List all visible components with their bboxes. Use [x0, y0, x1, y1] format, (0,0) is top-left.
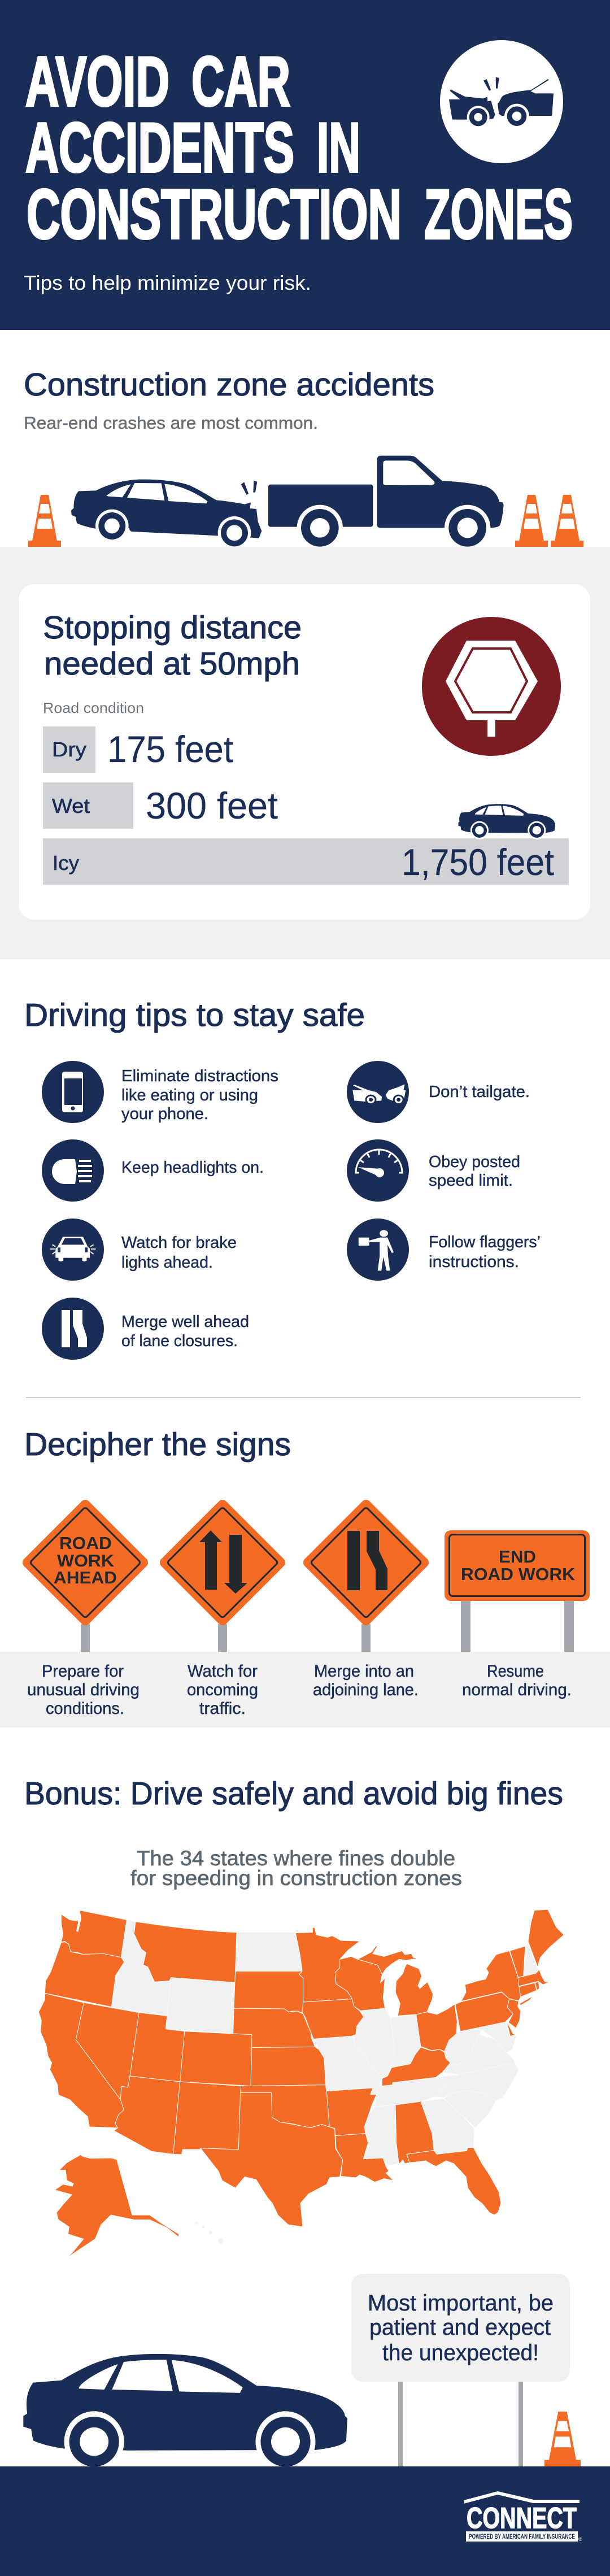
title: [25, 43, 573, 254]
map: united states: [38, 1909, 564, 2259]
heading: stopping distance: Stopping distance: [43, 610, 302, 646]
panel: decipher the signs: [0, 1426, 610, 1728]
caption: watch: Watch for: [188, 1662, 258, 1681]
bar: wet: Wet: [52, 794, 90, 817]
road sign: closing message: Most important, be: [368, 2291, 554, 2316]
heading: Driving tips to stay safe: [24, 997, 365, 1033]
road sign: closing message: [351, 2274, 570, 2466]
heading: stopping distance: [43, 610, 302, 682]
icon: car front with brake lights: [50, 1237, 96, 1261]
icon: pickup truck: [268, 456, 503, 551]
caption: resume: normal driving.: [462, 1681, 572, 1699]
sign: end road work: END: [499, 1547, 536, 1567]
icon: traffic cone far right: [551, 495, 583, 547]
icon: crashed sedan: [71, 480, 262, 550]
panel: driving tips: [24, 997, 541, 1360]
bar: dry: 175 feet: [107, 728, 233, 770]
panel: footer: [0, 2466, 610, 2576]
title: CONSTRUCTION: [27, 176, 402, 254]
icon: road sign: [422, 617, 561, 756]
icon: car crash: [440, 40, 563, 163]
tip: tailgate: [347, 1061, 530, 1123]
bar: icy: 1,750 feet: [402, 841, 554, 883]
tip: eliminate distractions: [42, 1061, 278, 1123]
icon: traffic cone right: [515, 495, 548, 547]
tip: eliminate distractions: your phone.: [121, 1105, 208, 1123]
bar: wet: 300 feet: [146, 785, 278, 826]
sign: road work ahead: ROAD: [59, 1533, 112, 1553]
caption: watch: traffic.: [199, 1699, 246, 1718]
panel: bonus: [24, 1776, 564, 2259]
caption: resume: [462, 1662, 572, 1699]
sign: two-way traffic: [165, 1505, 280, 1652]
tip: flaggers: Follow flaggers’: [429, 1233, 541, 1251]
title: AVOID: [25, 43, 169, 121]
sign: road work ahead: WORK: [57, 1551, 115, 1570]
tip: speed limit: speed limit.: [429, 1172, 513, 1190]
title: CAR: [191, 43, 290, 121]
caption: merge: adjoining lane.: [313, 1681, 419, 1699]
bar: dry: Dry: [52, 738, 86, 761]
logo: connect: [464, 2491, 582, 2542]
tip: headlights: Keep headlights on.: [121, 1159, 264, 1177]
bar: icy: Icy: [53, 851, 79, 874]
tip: brake lights: lights ahead.: [121, 1254, 213, 1272]
caption: prepare: Prepare for: [42, 1662, 124, 1681]
caption: prepare: conditions.: [46, 1699, 124, 1718]
tip: brake lights: Watch for brake: [121, 1234, 237, 1252]
caption: watch: oncoming: [187, 1681, 258, 1699]
heading: Bonus: Drive safely and avoid big fines: [24, 1776, 563, 1812]
bar: icy: [43, 838, 569, 885]
tip: speed limit: [347, 1139, 520, 1202]
map title: for speeding in construction zones: [130, 1866, 462, 1890]
panel: stopping distance card: [19, 584, 590, 920]
icon: headlight: [52, 1159, 92, 1184]
panel: gray band: [0, 547, 610, 959]
caption: prepare: [27, 1662, 140, 1718]
tip: tailgate: Don’t tailgate.: [429, 1083, 530, 1101]
tip: flaggers: [347, 1219, 541, 1281]
panel: closing scene: [23, 2274, 581, 2472]
panel: construction zone accidents: [24, 367, 583, 551]
map title: [130, 1847, 462, 1890]
road sign: closing message: patient and expect: [369, 2315, 551, 2340]
icon: traffic cone: [544, 2412, 581, 2466]
title: ACCIDENTS: [25, 109, 294, 187]
sign: road work ahead: AHEAD: [54, 1568, 117, 1587]
icon: flagger: [359, 1230, 394, 1270]
text: rear-end crashes: Rear-end crashes are most common.: [24, 413, 318, 433]
tip: flaggers: instructions.: [429, 1253, 519, 1271]
sign: road work ahead: [28, 1505, 143, 1652]
caption: merge: [313, 1662, 419, 1699]
icon: phone: [62, 1072, 83, 1112]
caption: prepare: unusual driving: [27, 1681, 140, 1699]
sign: end road work: ROAD WORK: [461, 1564, 576, 1584]
icon: traffic cone left: [28, 495, 61, 547]
caption band: [0, 1652, 610, 1728]
title: IN: [317, 109, 360, 187]
panel: header: [0, 0, 610, 330]
caption: resume: Resume: [487, 1662, 544, 1681]
tip: merge: [42, 1298, 249, 1360]
tip: speed limit: Obey posted: [429, 1153, 520, 1171]
logo: connect: ®: [578, 2536, 582, 2542]
icon: merging lanes: [62, 1310, 87, 1347]
caption: watch: [187, 1662, 258, 1718]
tip: eliminate distractions: like eating or using: [121, 1086, 258, 1104]
bar: wet: [43, 782, 278, 829]
logo: connect: CONNECT: [467, 2502, 577, 2535]
icon: speedometer: [356, 1150, 402, 1177]
heading: Construction zone accidents: [24, 367, 434, 403]
icon: sedan: [23, 2354, 347, 2472]
caption: merge: Merge into an: [314, 1662, 414, 1681]
sign: end road work: [445, 1530, 590, 1652]
icon: two cars: [352, 1084, 406, 1105]
road sign: closing message: the unexpected!: [382, 2340, 539, 2365]
label: road condition: Road condition: [43, 699, 144, 716]
icon: small car: [458, 804, 555, 839]
tip: headlights: [42, 1139, 264, 1202]
subtitle: Tips to help minimize your risk.: [24, 271, 311, 294]
sign: lane merge: [308, 1505, 424, 1652]
bar: dry: [43, 726, 233, 773]
tip: eliminate distractions: Eliminate distractions: [121, 1067, 278, 1085]
map title: The 34 states where fines double: [137, 1847, 455, 1870]
heading: Decipher the signs: [24, 1426, 291, 1463]
heading: stopping distance: needed at 50mph: [44, 646, 300, 682]
tip: merge: Merge well ahead: [121, 1313, 249, 1331]
tip: brake lights: [42, 1219, 237, 1281]
tip: merge: of lane closures.: [121, 1332, 238, 1350]
